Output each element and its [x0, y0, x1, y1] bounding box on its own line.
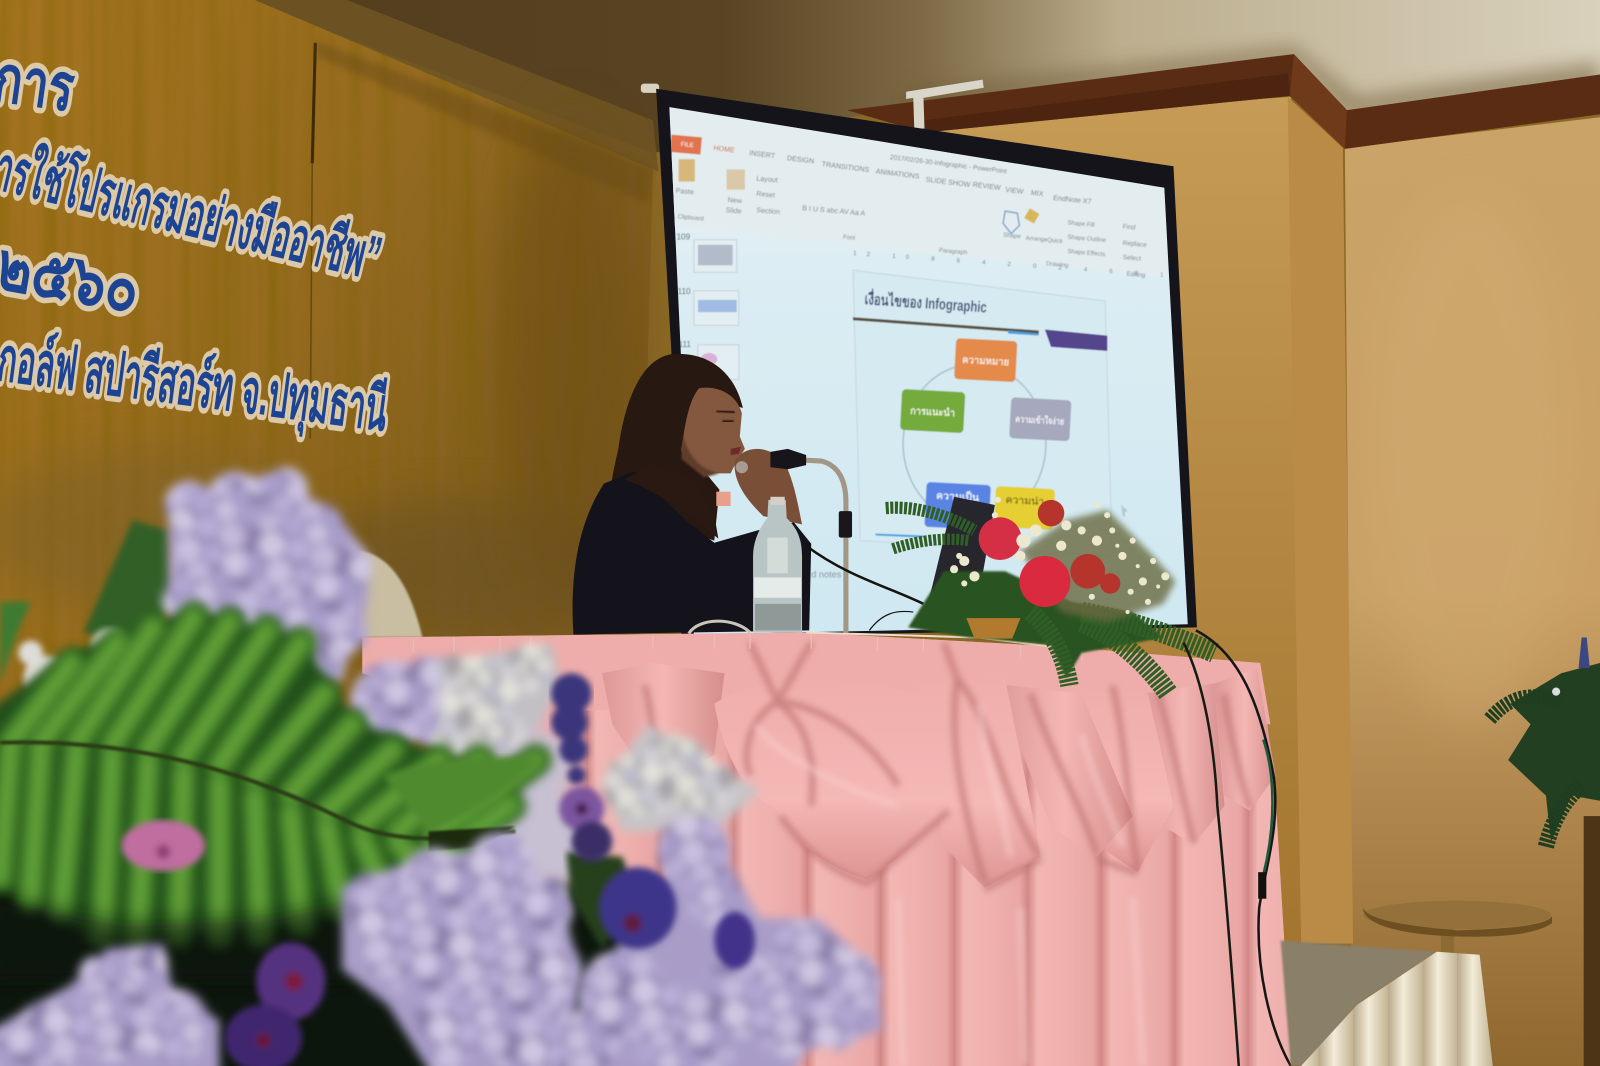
ribbon commands: Shape: [1003, 232, 1022, 240]
slide thumbnails: [677, 233, 739, 379]
ribbon commands: Clipboard: [677, 213, 704, 223]
frond tip leaf: [383, 757, 541, 831]
laptop: [923, 497, 995, 622]
ribbon commands: Shape Fill: [1067, 219, 1095, 229]
ribbon commands: Drawing: [1046, 260, 1069, 269]
hair: [611, 354, 743, 541]
dark foliage shadow: [0, 775, 786, 1066]
upper gathered band: [362, 632, 1270, 724]
slide heading: เงื่อนไขของ Infographic: [864, 287, 988, 317]
ribbon commands: Slide: [725, 206, 742, 216]
ribbon commands: Layout: [756, 175, 778, 184]
slide corner accent: [1045, 329, 1107, 351]
gypsophila stems mass: [1020, 510, 1176, 622]
ribbon commands: B I U S abc AV Aa A: [802, 204, 866, 218]
water bottle: [753, 497, 802, 632]
slide thumbnails: 110: [678, 287, 691, 296]
red carnation left: [979, 517, 1021, 560]
lower frond shade: [0, 887, 429, 979]
notes label: d notes: [811, 569, 842, 579]
ribbon commands: [675, 159, 1147, 279]
box: introduction: การแนะนำ: [910, 405, 955, 419]
fold highlights: [755, 704, 1143, 1066]
gold curtain backdrop: [0, 0, 658, 714]
red carnations right: [1038, 500, 1120, 594]
hair front strands: [638, 379, 709, 500]
slide thumbnails: 109: [677, 233, 691, 242]
ribbon commands: Font: [843, 234, 856, 242]
ribbon commands: Quick: [1047, 237, 1064, 245]
back fern leaf: [84, 520, 173, 653]
main fern frond: [0, 617, 536, 938]
ruler numbers: 12 10 8 6 4 2 0 2 4 6 8 10 12: [853, 250, 1227, 283]
fern base: [0, 612, 490, 944]
back wall beside the screen: [847, 97, 1301, 949]
upper lavender cluster: [162, 467, 372, 687]
purple blooms: [224, 786, 755, 1066]
right lavender cluster: [551, 815, 883, 1066]
ribbon commands: Shape Outline: [1067, 234, 1107, 244]
pleated lower drape: [362, 632, 1292, 1066]
face shadow: [682, 428, 719, 477]
box: necessity: [924, 482, 991, 530]
ribbon tabs: REVIEW: [972, 181, 1001, 192]
black jacket: [573, 471, 811, 634]
ribbon commands: Shape Effects: [1067, 248, 1106, 258]
frond dark tip: [429, 826, 515, 852]
microphone and stand: [736, 449, 852, 632]
right wall: [1345, 117, 1600, 1066]
pink flower: [121, 820, 205, 871]
box: interest: [994, 486, 1055, 530]
banner line 4: กอล์ฟ สปารีสอร์ท จ.ปทุมธานี: [0, 325, 392, 447]
frond midrib: [0, 742, 515, 839]
pale lavender cluster left: [350, 656, 473, 749]
potted plant at the right edge: [1490, 638, 1600, 1066]
box: easy to understand: [1009, 397, 1071, 441]
projected area: [669, 107, 1188, 634]
mouse cursor: [1121, 505, 1128, 517]
ribbon tabs: EndNote X7: [1053, 194, 1092, 206]
white table-edge trim: [806, 632, 1061, 648]
box: meaning: [954, 338, 1017, 382]
ear: [658, 411, 672, 438]
slide page: [853, 270, 1112, 556]
swags: [490, 675, 566, 740]
fern mass: [908, 571, 1163, 678]
table pins: [413, 634, 1082, 661]
delphinium spike: [551, 673, 592, 784]
lower lavender cluster: [342, 832, 582, 1066]
projector screen mounting bracket: [641, 80, 984, 130]
table flower arrangement: [886, 497, 1214, 694]
round side table: [1363, 901, 1552, 959]
speaker: [573, 354, 811, 634]
lips: [731, 447, 741, 455]
ribbon commands: Paste: [675, 187, 694, 196]
hair over shoulder: [624, 464, 718, 539]
ribbon commands: Editing: [1126, 270, 1146, 279]
red carnation centre: [1019, 556, 1070, 607]
ferns: [886, 508, 1214, 694]
ribbon tabs: ANIMATIONS: [875, 167, 920, 181]
ceiling: [0, 0, 1600, 153]
orange note behind arm: [716, 492, 731, 506]
ribbon tabs: INSERT: [749, 149, 776, 160]
green leaf among flowers: [566, 852, 638, 949]
ribbon commands: Select: [1122, 254, 1141, 263]
pillar corner: [1288, 97, 1353, 944]
ribbon tabs: [670, 135, 1092, 206]
ribbon commands: Paragraph: [939, 247, 968, 256]
ribbon area: [669, 107, 1167, 277]
banner line 2: ารใช้โปรแกรมอย่างมืออาชีพ”: [0, 132, 388, 292]
ribbon tabs: MIX: [1030, 189, 1044, 198]
ribbon tabs: SLIDE SHOW: [925, 176, 971, 189]
box: interest: ความน่า: [1005, 494, 1045, 508]
ribbon commands: Replace: [1122, 240, 1147, 249]
white cluster right: [602, 724, 760, 831]
wood ceiling moulding: [847, 54, 1600, 149]
ceiling shadow near moulding: [898, 46, 1600, 117]
box: necessity: ความเป็น: [936, 488, 979, 504]
banner lettering: [0, 42, 392, 447]
white chair back: [357, 551, 422, 638]
slide heading rule: [853, 317, 1039, 334]
ribbon commands: Find: [1122, 224, 1136, 232]
ribbon tabs: HOME: [713, 144, 735, 155]
ribbon tabs: VIEW: [1005, 186, 1024, 196]
ribbon tabs: DESIGN: [786, 154, 815, 165]
cycle ring: [902, 366, 1047, 502]
ribbon commands: Section: [756, 206, 780, 216]
foreground flowers and fern: [0, 467, 883, 1066]
soft fold shadows: [645, 643, 1250, 890]
face: [677, 388, 745, 473]
white daisies: [950, 497, 1169, 614]
ribbon tabs: FILE: [680, 141, 694, 149]
screen frame: [656, 89, 1197, 638]
hands: [735, 449, 802, 524]
slide thumbnails: 111: [679, 340, 691, 349]
eye and brow: [716, 411, 735, 421]
bottom-left lavender cluster: [0, 944, 219, 1066]
slide footer line: [876, 535, 923, 537]
ribbon commands: Reset: [756, 190, 775, 199]
ribbon tabs: 2017/02/26-30-Infographic - PowerPoint: [890, 154, 1007, 175]
pale blurred blooms under fern tip: [459, 730, 601, 886]
white buds left: [18, 628, 128, 701]
large centre swag: [714, 681, 949, 879]
cables on the table: [689, 546, 923, 633]
box: introduction: [900, 389, 965, 433]
ribbon commands: New: [727, 196, 743, 205]
pot: [966, 618, 1020, 639]
ribbon commands: Arrange: [1025, 235, 1048, 244]
white-grey cluster: [431, 643, 561, 768]
wall lighting glow: [1367, 194, 1571, 724]
box: easy to understand: ความเข้าใจง่าย: [1015, 413, 1065, 427]
pink table skirt: [362, 632, 1292, 1066]
white covered side table: [1281, 941, 1493, 1066]
ribbon tabs: TRANSITIONS: [821, 160, 870, 174]
black and green cables on the skirt: [1184, 630, 1291, 1066]
box: meaning: ความหมาย: [962, 355, 1009, 368]
projection screen: [656, 89, 1227, 638]
